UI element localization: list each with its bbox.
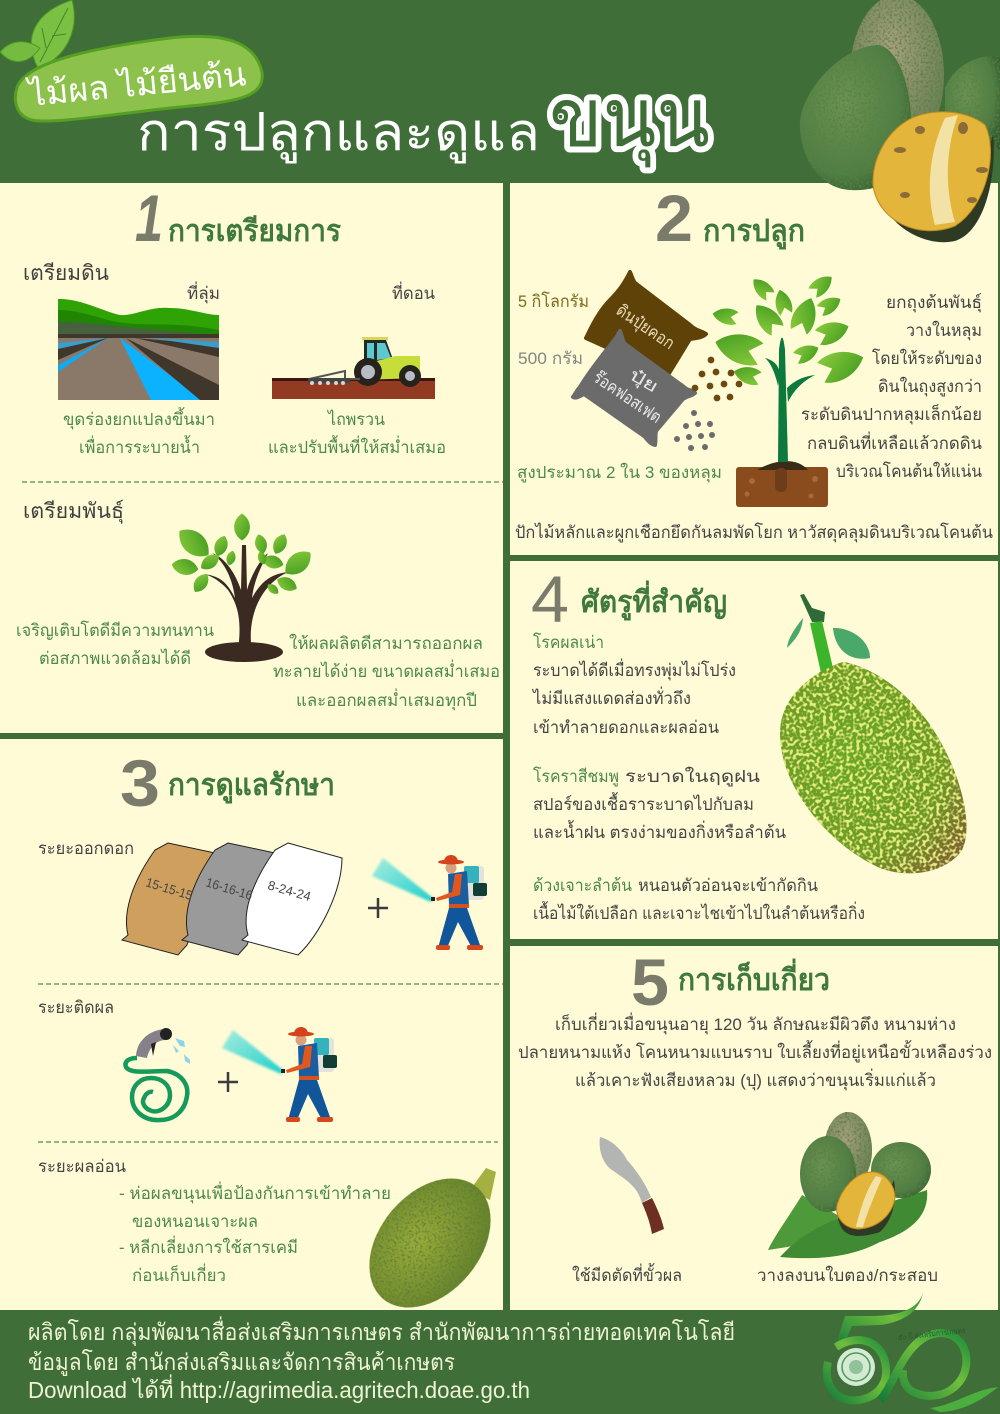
panel: 1 preparation	[0, 183, 503, 733]
icon: phosphate bag: ร๊อคฟอสเฟต	[590, 368, 665, 427]
text block: pink disease: ระบาดในฤดูฝน	[625, 766, 760, 787]
text block: stem borer: ด้วงเจาะลำต้น	[533, 876, 632, 895]
heading: section 5	[631, 945, 830, 1019]
icon: farmer spraying	[222, 1027, 337, 1122]
title: ขนุน	[549, 73, 710, 168]
title	[137, 73, 710, 168]
subheading: young fruit stage: ระยะผลอ่อน	[38, 1157, 126, 1176]
logo: 50th anniversary	[827, 1292, 998, 1412]
caption: seedling right	[273, 633, 500, 711]
heading: section 3	[120, 746, 335, 820]
caption: upland: ไถพรวน	[326, 409, 385, 429]
caption: lowland: ขุดร่องยกแปลงขึ้นมา	[63, 407, 215, 430]
footer credits	[28, 1316, 735, 1403]
header icon: leaves	[0, 0, 74, 68]
icon: phosphate bag: ปุ๋ย	[626, 365, 661, 397]
text block: planting steps: ระดับดินปากหลุมเล็กน้อย	[801, 403, 982, 425]
text block: harvest signs: แล้วเคาะฟังเสียงหลวม (ปุ) แสดงว่าขนุนเริ่มแก่แล้ว	[575, 1068, 936, 1091]
icon: phosphate bag	[573, 331, 695, 445]
text block: planting steps: บริเวณโคนต้นให้แน่น	[836, 461, 982, 481]
heading: section 2	[655, 181, 805, 255]
heading: section 4: 4	[531, 562, 569, 636]
text block: harvest signs	[518, 1012, 992, 1091]
caption: lay on leaves or sack: วางลงบนใบตอง/กระสอบ	[757, 1265, 938, 1285]
panel: 5 harvest	[510, 946, 998, 1310]
text block: harvest signs: เก็บเกี่ยวเมื่อขนุนอายุ 120 วัน ลักษณะมีผิวตึง หนามห่าง	[555, 1012, 956, 1035]
image: young jackfruit	[345, 1155, 515, 1331]
caption: seedling right: ให้ผลผลิตดีสามารถออกผล	[289, 633, 483, 653]
text block: planting steps: โดยให้ระดับของ	[872, 348, 982, 368]
footer credits: ผลิตโดย กลุ่มพัฒนาสื่อส่งเสริมการเกษตร สำนักพัฒนาการถ่ายทอดเทคโนโลยี	[28, 1316, 735, 1346]
illustration: three fertilizer bags	[122, 843, 342, 955]
icon: plus	[218, 1072, 238, 1092]
icon: manure bag: ดินปุ๋ยคอก	[612, 301, 678, 354]
text block: planting steps: กลบดินที่เหลือแล้วกดดิน	[807, 431, 982, 453]
caption: cut at stem: ใช้มีดตัดที่ขั้วผล	[572, 1263, 682, 1285]
subheading: flowering stage: ระยะออกดอก	[38, 839, 134, 858]
text block: stem borer: เนื้อไม้ใต้เปลือก และเจาะไชเข้าไปในลำต้นหรือกิ่ง	[533, 901, 865, 923]
heading: section 4: ศัตรูที่สำคัญ	[581, 580, 727, 621]
caption: seedling left: เจริญเติบโตดีมีความทนทาน	[16, 620, 214, 640]
text block: pink disease: โรคราสีชมพู	[533, 766, 619, 787]
heading: section 1: การเตรียมการ	[168, 215, 341, 248]
heading: section 1	[135, 181, 341, 255]
text block: young fruit advice: - ห่อผลขนุนเพื่อป้องกันการเข้าทำลาย	[119, 1181, 391, 1204]
caption: seedling left	[16, 620, 214, 668]
text block: fruit rot: ไม่มีแสงแดดส่องทั่วถึง	[531, 686, 691, 708]
text block: fruit rot: โรคผลเน่า	[533, 632, 604, 652]
illustration: three fertilizer bags: 15-15-15	[144, 875, 194, 903]
text block: pink disease: และน้ำฝน ตรงง่ามของกิ่งหรือลำต้น	[533, 820, 786, 842]
panel: 2 planting	[510, 183, 998, 555]
caption: seedling right: ทะลายได้ง่าย ขนาดผลสม่ำเสมอ	[273, 659, 500, 681]
icon: manure bag	[586, 272, 706, 375]
panel: 3 care	[0, 739, 503, 1310]
illustration: three fertilizer bags: 8-24-24	[266, 877, 313, 904]
text block: planting steps	[801, 293, 982, 481]
heading: section 3: การดูแลรักษา	[168, 769, 335, 804]
icon: manure granules	[692, 357, 742, 401]
label: 500 g phosphate: 500 กรัม	[518, 349, 583, 368]
footer credits: ข้อมูลโดย สำนักส่งเสริมและจัดการสินค้าเกษตร	[28, 1349, 455, 1376]
panel: 4 pests	[510, 561, 998, 939]
icon: machete	[600, 1137, 664, 1234]
heading: section 1: 1	[135, 181, 163, 255]
illustration: raised beds field	[58, 299, 219, 400]
label: two thirds of hole: สูงประมาณ 2 ใน 3 ของหลุม	[517, 462, 722, 483]
icon: plus	[368, 898, 388, 918]
heading: section 5: การเก็บเกี่ยว	[678, 958, 830, 997]
text block: planting steps: วางในหลุม	[906, 320, 982, 341]
label: lowland: ที่ลุ่ม	[187, 281, 220, 304]
image: jackfruits on banana leaves	[768, 1112, 931, 1258]
caption: lowland: เพื่อการระบายน้ำ	[79, 435, 200, 457]
text block: fruit rot: เข้าทำลายดอกและผลอ่อน	[533, 718, 719, 737]
text block: harvest signs: ปลายหนามแห้ง โคนหนามแบนราบ ใบเลี้ยงที่อยู่เหนือขั้วเหลืองร่วง	[518, 1040, 992, 1063]
text block: fruit rot: ระบาดได้ดีเมื่อทรงพุ่มไม่โปร่ง	[533, 658, 736, 681]
header badge: fruit tree type	[15, 36, 262, 121]
heading: section 5: 5	[631, 945, 669, 1019]
illustration: three fertilizer bags: 16-16-16	[204, 875, 254, 903]
heading: section 2: 2	[655, 181, 693, 255]
caption: seedling left: ต่อสภาพแวดล้อมได้ดี	[39, 648, 191, 668]
header badge: fruit tree type: ไม้ผล ไม้ยืนต้น	[24, 55, 248, 113]
heading: section 4	[531, 562, 727, 636]
image: green jackfruit	[780, 594, 967, 873]
label: upland: ที่ดอน	[392, 281, 435, 303]
label: 5 kg manure: 5 กิโลกรัม	[518, 291, 589, 311]
text block: stem borer: หนอนตัวอ่อนจะเข้ากัดกิน	[638, 876, 818, 895]
icon: phosphate granules	[674, 410, 715, 451]
caption: upland: และปรับพื้นที่ให้สม่ำเสมอ	[268, 435, 446, 457]
illustration: tractor	[272, 337, 435, 399]
text block: young fruit advice: ก่อนเก็บเกี่ยว	[132, 1263, 226, 1285]
icon: water hose	[125, 1028, 190, 1120]
subheading: prepare seedlings: เตรียมพันธุ์	[23, 499, 124, 524]
footer credits: Download ได้ที่ http://agrimedia.agritech.doae.go.th	[28, 1374, 530, 1403]
logo: 50th anniversary: ๕๐ ปี ส่งเสริมการเกษตร	[897, 1326, 966, 1342]
text block: planting steps: ดินในถุงสูงกว่า	[878, 376, 982, 397]
caption: lowland	[63, 407, 215, 457]
text block: young fruit advice	[119, 1181, 391, 1285]
title: การปลูกและดูแล	[137, 104, 540, 164]
text block: planting steps: ยกถุงต้นพันธุ์	[886, 293, 982, 313]
text: staking note: ปักไม้หลักและผูกเชือกยึดกันลมพัดโยก หาวัสดุคลุมดินบริเวณโคนต้น	[515, 522, 993, 543]
illustration: planted seedling	[711, 271, 868, 507]
caption: seedling right: และออกผลสม่ำเสมอทุกปี	[296, 688, 477, 711]
heading: section 2: การปลูก	[703, 215, 805, 250]
caption: upland	[268, 409, 446, 457]
icon: farmer spraying	[372, 855, 487, 950]
text block: young fruit advice: - หลีกเลี่ยงการใช้สารเคมี	[119, 1235, 298, 1257]
text block: pink disease	[533, 766, 786, 842]
heading: section 3: 3	[120, 746, 160, 820]
text block: young fruit advice: ของหนอนเจาะผล	[132, 1212, 258, 1231]
text block: fruit rot	[531, 632, 736, 737]
subheading: prepare soil: เตรียมดิน	[23, 262, 109, 285]
text block: stem borer	[533, 876, 865, 923]
subheading: fruit set stage: ระยะติดผล	[38, 998, 114, 1017]
header image: jackfruits	[800, 0, 1000, 242]
text block: pink disease: สปอร์ของเชื้อราระบาดไปกับลม	[533, 792, 754, 814]
illustration: young tree	[170, 514, 316, 662]
